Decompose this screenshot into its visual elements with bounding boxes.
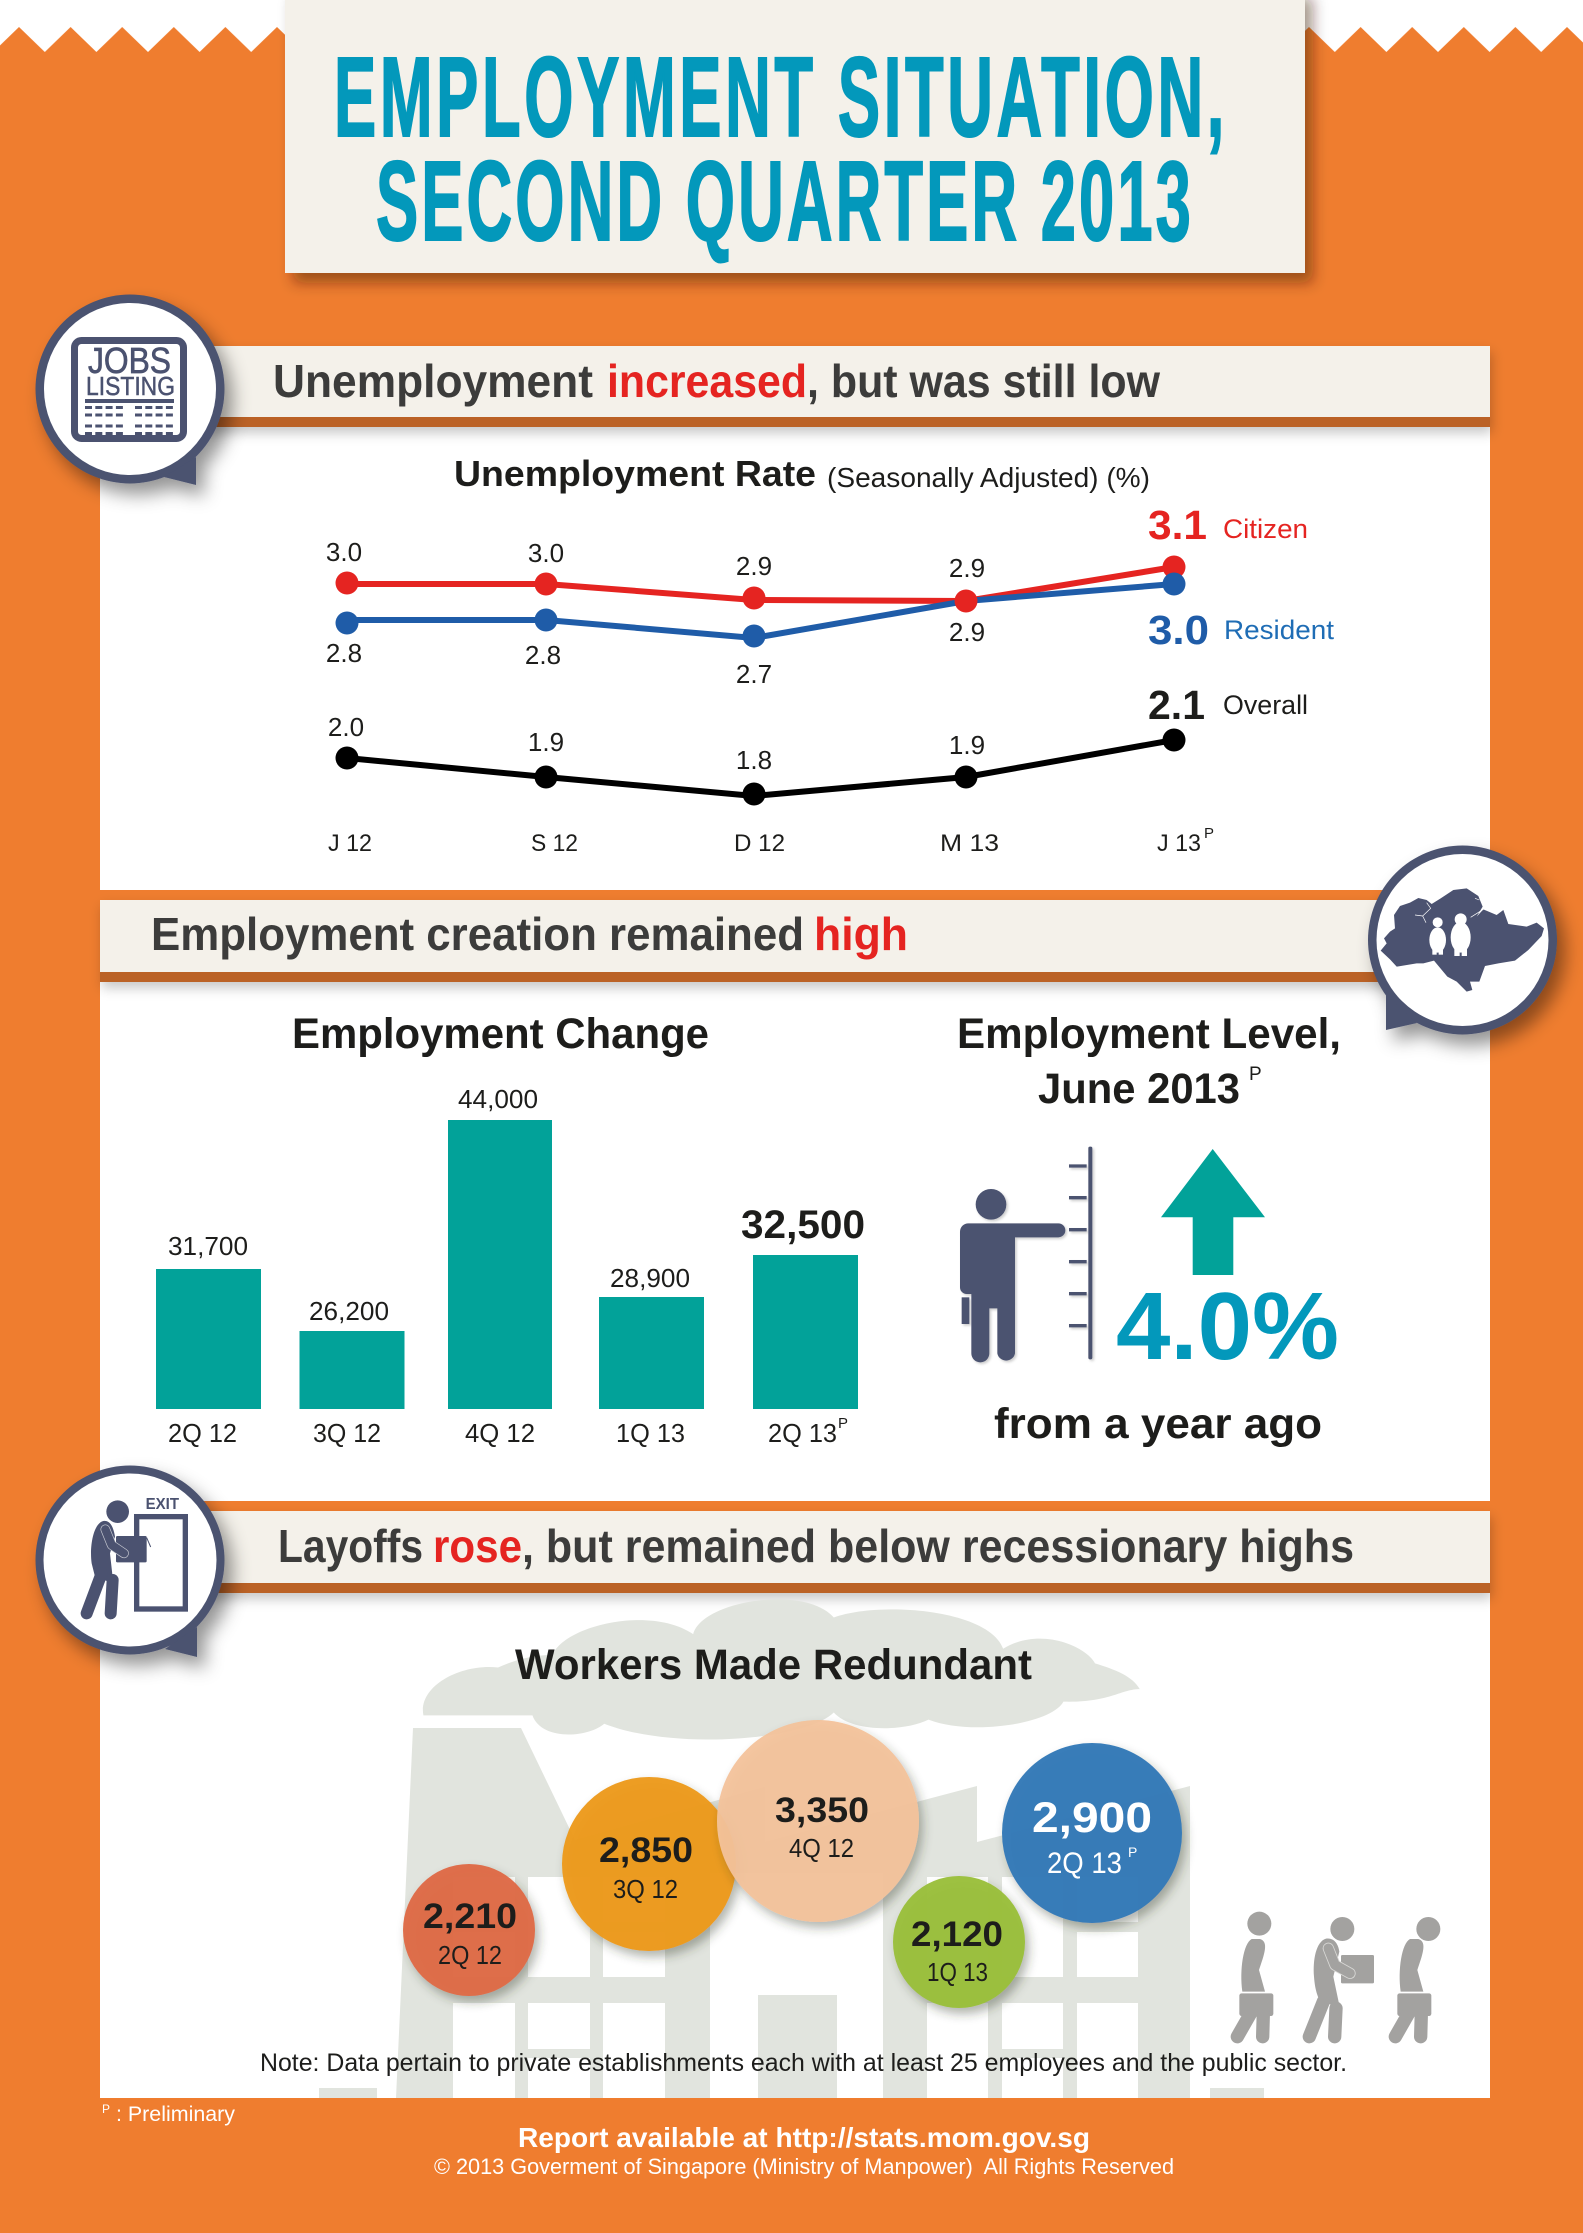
icon: three departing workers [1237,1912,1440,2037]
panel: unemployment [36,294,1490,890]
bubble: 1Q 13 [893,1876,1025,2008]
data labels: 2.9 [736,551,772,581]
bubble: 3Q 12: 3Q 12 [613,1874,678,1904]
worker carrying box [1309,1917,1374,2037]
data labels: 2.9 [949,617,985,647]
smoke cloud [423,1599,1140,1740]
bar values: 32,500 [741,1203,865,1247]
panel: employment creation [100,846,1557,1501]
note: Note: Data pertain to private establishments each with at least 25 employees and the public sector. [260,2049,1347,2077]
title line 1: EMPLOYMENT SITUATION, [334,35,1224,161]
chart title: unemployment rate: Unemployment Rate [454,453,816,494]
x axis labels: D 12 [734,830,785,857]
data labels: 2.8 [326,638,362,668]
footer: copyright: © 2013 Goverment of Singapore (Ministry of Manpower) All Rights Reserved [434,2154,1174,2179]
caption: from a year ago: from a year ago [994,1400,1322,1448]
bar values: 26,200 [309,1296,389,1326]
bars [156,1120,858,1409]
data labels: 2.7 [736,659,772,689]
x axis labels: M 13 [940,830,999,857]
citizen marker March 2013 [954,590,978,612]
bar values: 31,700 [168,1231,248,1261]
stat: 4.0 percent: 4.0% [1116,1273,1339,1380]
worker with briefcase [1237,1912,1273,2037]
bubble: 3Q 12: 2,850 [599,1831,693,1870]
icon: person measuring against ruler [960,1147,1092,1362]
data labels: 3.0 [326,537,362,567]
bubble: 2Q 12: 2Q 12 [438,1940,502,1970]
latest value: citizen: 3.1 [1148,502,1207,548]
panel: layoffs [36,1466,1490,2098]
series: citizen [336,556,1186,610]
bar chart: employment change [156,1010,865,1448]
banner: layoffs [100,1511,1490,1593]
heading: employment level [957,1010,1341,1113]
latest value: resident: 3.0 [1148,607,1209,653]
quarter labels: P [838,1415,848,1432]
footnote: preliminary: : Preliminary [116,2103,235,2126]
icon: worker leaving through exit badge [36,1466,224,1657]
bar values: 44,000 [458,1084,538,1114]
illustration: factory and smoke [319,1599,1264,2098]
bubble: 2Q 12: 2,210 [423,1897,517,1936]
latest value: overall: Overall [1223,690,1308,720]
quarter labels [168,1415,848,1448]
heading: employment creation: high [814,908,908,960]
bubble: 4Q 12: 3,350 [775,1791,869,1830]
title card [285,0,1305,273]
data labels: 1.8 [736,745,772,775]
bubble: 2Q 13: P [1128,1844,1137,1860]
data labels: 3.0 [528,538,564,568]
quarter labels: 3Q 12 [313,1418,381,1448]
title line 2: SECOND QUARTER 2013 [376,139,1191,265]
line chart: unemployment rate [326,502,1334,857]
data labels: 1.9 [949,730,985,760]
factory windows [453,1873,1138,2098]
quarter labels: 2Q 13 [768,1418,837,1448]
x axis labels: J 12 [328,830,372,857]
arrow: up [1161,1149,1265,1275]
data labels: 2.0 [328,712,364,742]
icon: jobs listing badge: JOBS [88,340,171,381]
bubble: 3Q 12 [562,1777,736,1951]
bubble: 2Q 12 [403,1864,535,1996]
heading: employment level: June 2013 [1038,1065,1240,1113]
banner: employment creation [100,900,1490,982]
x axis labels [328,825,1214,857]
second worker with briefcase [1395,1917,1440,2037]
heading: unemployment increased: , but was still low [807,355,1160,407]
quarter labels: 1Q 13 [616,1418,685,1448]
latest value: citizen: Citizen [1223,514,1308,544]
heading: employment level: Employment Level, [957,1010,1341,1058]
heading: layoffs rose: Layoffs [278,1520,423,1572]
bubble: 1Q 13: 1Q 13 [927,1957,988,1987]
latest value: citizen [1148,502,1308,548]
quarter labels: 4Q 12 [465,1418,535,1448]
chart title: workers made redundant: Workers Made Redundant [515,1641,1032,1689]
footnote: preliminary: P [102,2102,110,2116]
bubble: 2Q 13: 2Q 13 [1047,1847,1122,1880]
heading: employment creation: Employment creation remained [151,908,804,960]
x axis labels: J 13 [1157,830,1201,857]
factory door and ground [319,1995,1264,2098]
latest value: resident [1148,607,1334,653]
heading: unemployment increased: Unemployment [273,355,593,407]
heading: employment level: P [1249,1064,1262,1085]
data labels [326,537,985,775]
bubble: 2Q 13 [1002,1743,1182,1923]
x axis labels: P [1204,825,1214,842]
data labels: 2.9 [949,553,985,583]
x axis labels: S 12 [531,830,578,857]
bubble: 1Q 13: 2,120 [911,1915,1003,1954]
series: overall [336,728,1186,806]
latest value: resident: Resident [1224,615,1334,645]
series: resident [336,572,1186,648]
chart title: Employment Change [292,1010,709,1058]
heading: layoffs rose: , but remained below recessionary highs [522,1520,1354,1572]
latest value: overall: 2.1 [1148,682,1205,728]
heading: layoffs rose: rose [433,1520,522,1572]
heading: unemployment increased [273,355,1160,407]
chart title: unemployment rate [454,453,1150,494]
chart title: unemployment rate: (Seasonally Adjusted) (%) [827,462,1150,493]
icon: worker leaving through exit badge: EXIT [146,1496,179,1513]
data labels: 1.9 [528,727,564,757]
bubble: 2Q 13: 2,900 [1032,1794,1152,1842]
bar values: 28,900 [610,1263,690,1293]
bubble: 4Q 12: 4Q 12 [789,1833,854,1863]
footer: report link: Report available at http://stats.mom.gov.sg [518,2122,1090,2153]
bar values [168,1084,865,1326]
icon: Singapore map badge [1368,846,1557,1034]
heading: unemployment increased: increased [607,355,807,407]
icon: jobs listing badge [36,294,224,485]
icon: jobs listing badge: LISTING [86,371,175,401]
latest value: overall [1148,682,1308,728]
factory building [396,1728,1190,2098]
quarter labels: 2Q 12 [168,1418,237,1448]
banner: unemployment [100,346,1490,427]
data labels: 2.8 [525,640,561,670]
torn paper top edge [0,0,1583,52]
bubble: 4Q 12 [717,1720,919,1922]
